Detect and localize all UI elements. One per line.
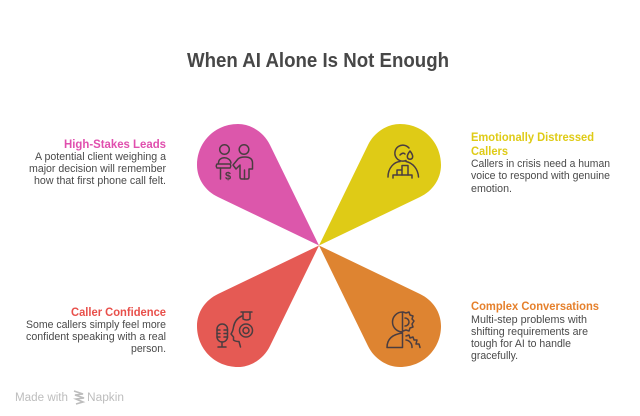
icon: microphone and head with headset [217,312,252,347]
panel: complex conversations petal [319,246,441,367]
text block: high-stakes leads [29,137,167,187]
text block: complex conversations: Complex Conversations [471,299,599,313]
icon: two people with money: $ [225,170,231,182]
text block: caller confidence: Some callers simply feel more [26,319,166,331]
icon: half head and gears [387,312,420,348]
text block: emotionally distressed callers: emotion. [471,183,512,195]
text block: emotionally distressed callers: Callers in crisis need a human [471,158,610,170]
text block: emotionally distressed callers: voice to respond with genuine [471,170,610,182]
text block: high-stakes leads: High-Stakes Leads [64,137,166,151]
text block: complex conversations: shifting requirements are [471,326,588,338]
text block: high-stakes leads: how that first phone call felt. [34,175,166,187]
text block: caller confidence: confident speaking with a real [26,331,166,343]
footer: made with napkin: Napkin [87,392,124,404]
text block: emotionally distressed callers: Callers [471,144,508,158]
icon: two people with money [216,145,252,182]
text block: complex conversations [471,299,599,362]
text block: emotionally distressed callers [471,130,610,195]
text block: emotionally distressed callers: Emotionally Distressed [471,130,594,144]
text block: caller confidence: person. [131,343,166,355]
text block: complex conversations: Multi-step problems with [471,314,587,326]
footer: made with napkin [15,391,124,404]
icon: distressed caller with tear [388,145,418,178]
text block: complex conversations: tough for AI to handle [471,338,571,350]
text block: complex conversations: gracefully. [471,350,518,362]
panel: high-stakes leads petal [197,124,319,246]
panel: caller confidence petal [197,246,319,367]
text block: caller confidence [26,305,166,355]
title: When AI Alone Is Not Enough [187,50,449,72]
footer: made with napkin: Made with [15,392,68,404]
text block: caller confidence: Caller Confidence [71,305,166,319]
text block: high-stakes leads: A potential client weighing a [35,151,167,163]
text block: high-stakes leads: major decision will remember [29,163,166,175]
panel: emotionally distressed petal [319,124,441,246]
